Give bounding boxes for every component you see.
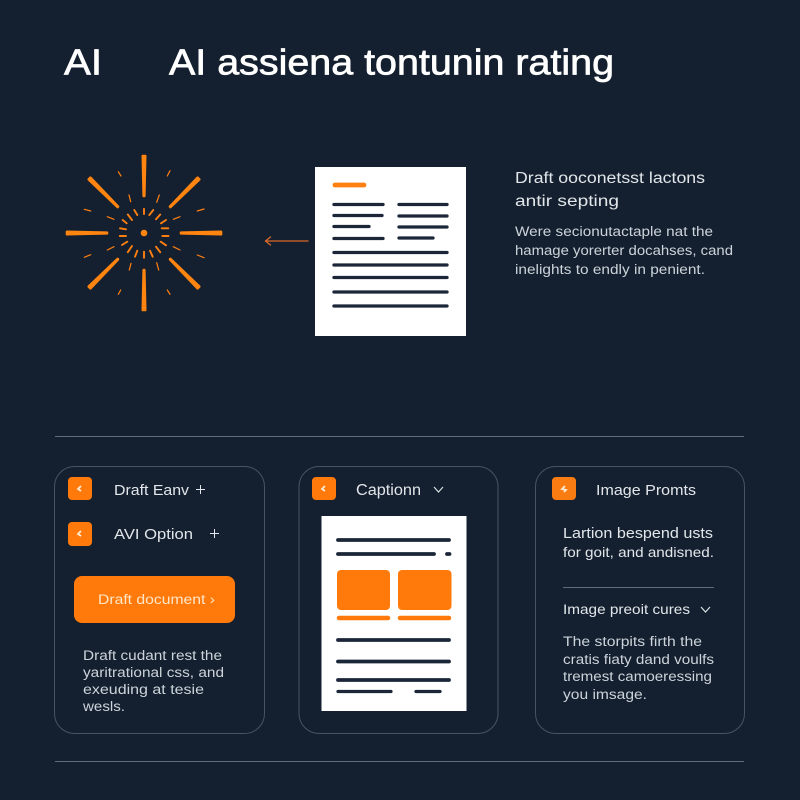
label: Draft Eanv: Draft Eanv — [114, 483, 190, 499]
icon: orange square 1 — [68, 477, 92, 500]
label: Captionn: Captionn — [356, 482, 421, 499]
title: AI — [64, 42, 102, 82]
text block: image notes — [563, 634, 714, 702]
icon: orange square 2 — [68, 522, 92, 546]
text block: description: Were secionutactaple nat the — [515, 224, 713, 239]
text block: image notes: tremest camoeressing — [563, 669, 712, 684]
label: AVI Option — [114, 527, 219, 543]
document with image blocks — [322, 516, 466, 711]
text block: description: Draft ooconetsst lactons — [515, 170, 705, 187]
button: draft document — [74, 576, 235, 623]
arrow: pointing left to starburst — [266, 237, 308, 245]
panel: caption — [299, 466, 498, 734]
text block: lartion: for goit, and andisned. — [563, 544, 714, 560]
text block: description: hamage yorerter docahses, cand — [515, 243, 733, 258]
text block: draft notes: exeuding at tesie — [83, 682, 204, 697]
text block: description: inelights to endly in penient. — [515, 262, 705, 277]
title: AI assiena tontunin rating — [169, 42, 614, 82]
label: Image Promts: Image Promts — [596, 483, 696, 499]
text block: draft notes: Draft cudant rest the — [83, 648, 222, 663]
text block: description: antir septing — [515, 193, 619, 210]
label: image preoit cures: Image preoit cures — [563, 601, 690, 617]
icon: orange square — [552, 477, 576, 500]
text block: image notes: you imsage. — [563, 687, 647, 702]
text block: lartion — [563, 526, 714, 560]
text block: lartion: Lartion bespend usts — [563, 526, 713, 542]
text block: image notes: The storpits firth the — [563, 634, 702, 649]
label: AVI Option: AVI Option — [114, 527, 193, 543]
text block: image notes: cratis fiaty dand voulfs — [563, 652, 714, 667]
icon: orange starburst — [67, 156, 221, 310]
text block: draft notes: yaritrational css, and — [83, 665, 224, 680]
document illustration — [315, 167, 466, 336]
text block: draft notes — [82, 648, 224, 714]
button: draft document: Draft document › — [98, 592, 215, 607]
panel: image prompts — [536, 466, 744, 734]
panel: draft options — [54, 466, 264, 734]
icon: orange square — [312, 477, 336, 500]
text block: draft notes: wesls. — [82, 699, 125, 714]
text block: description — [515, 170, 733, 277]
